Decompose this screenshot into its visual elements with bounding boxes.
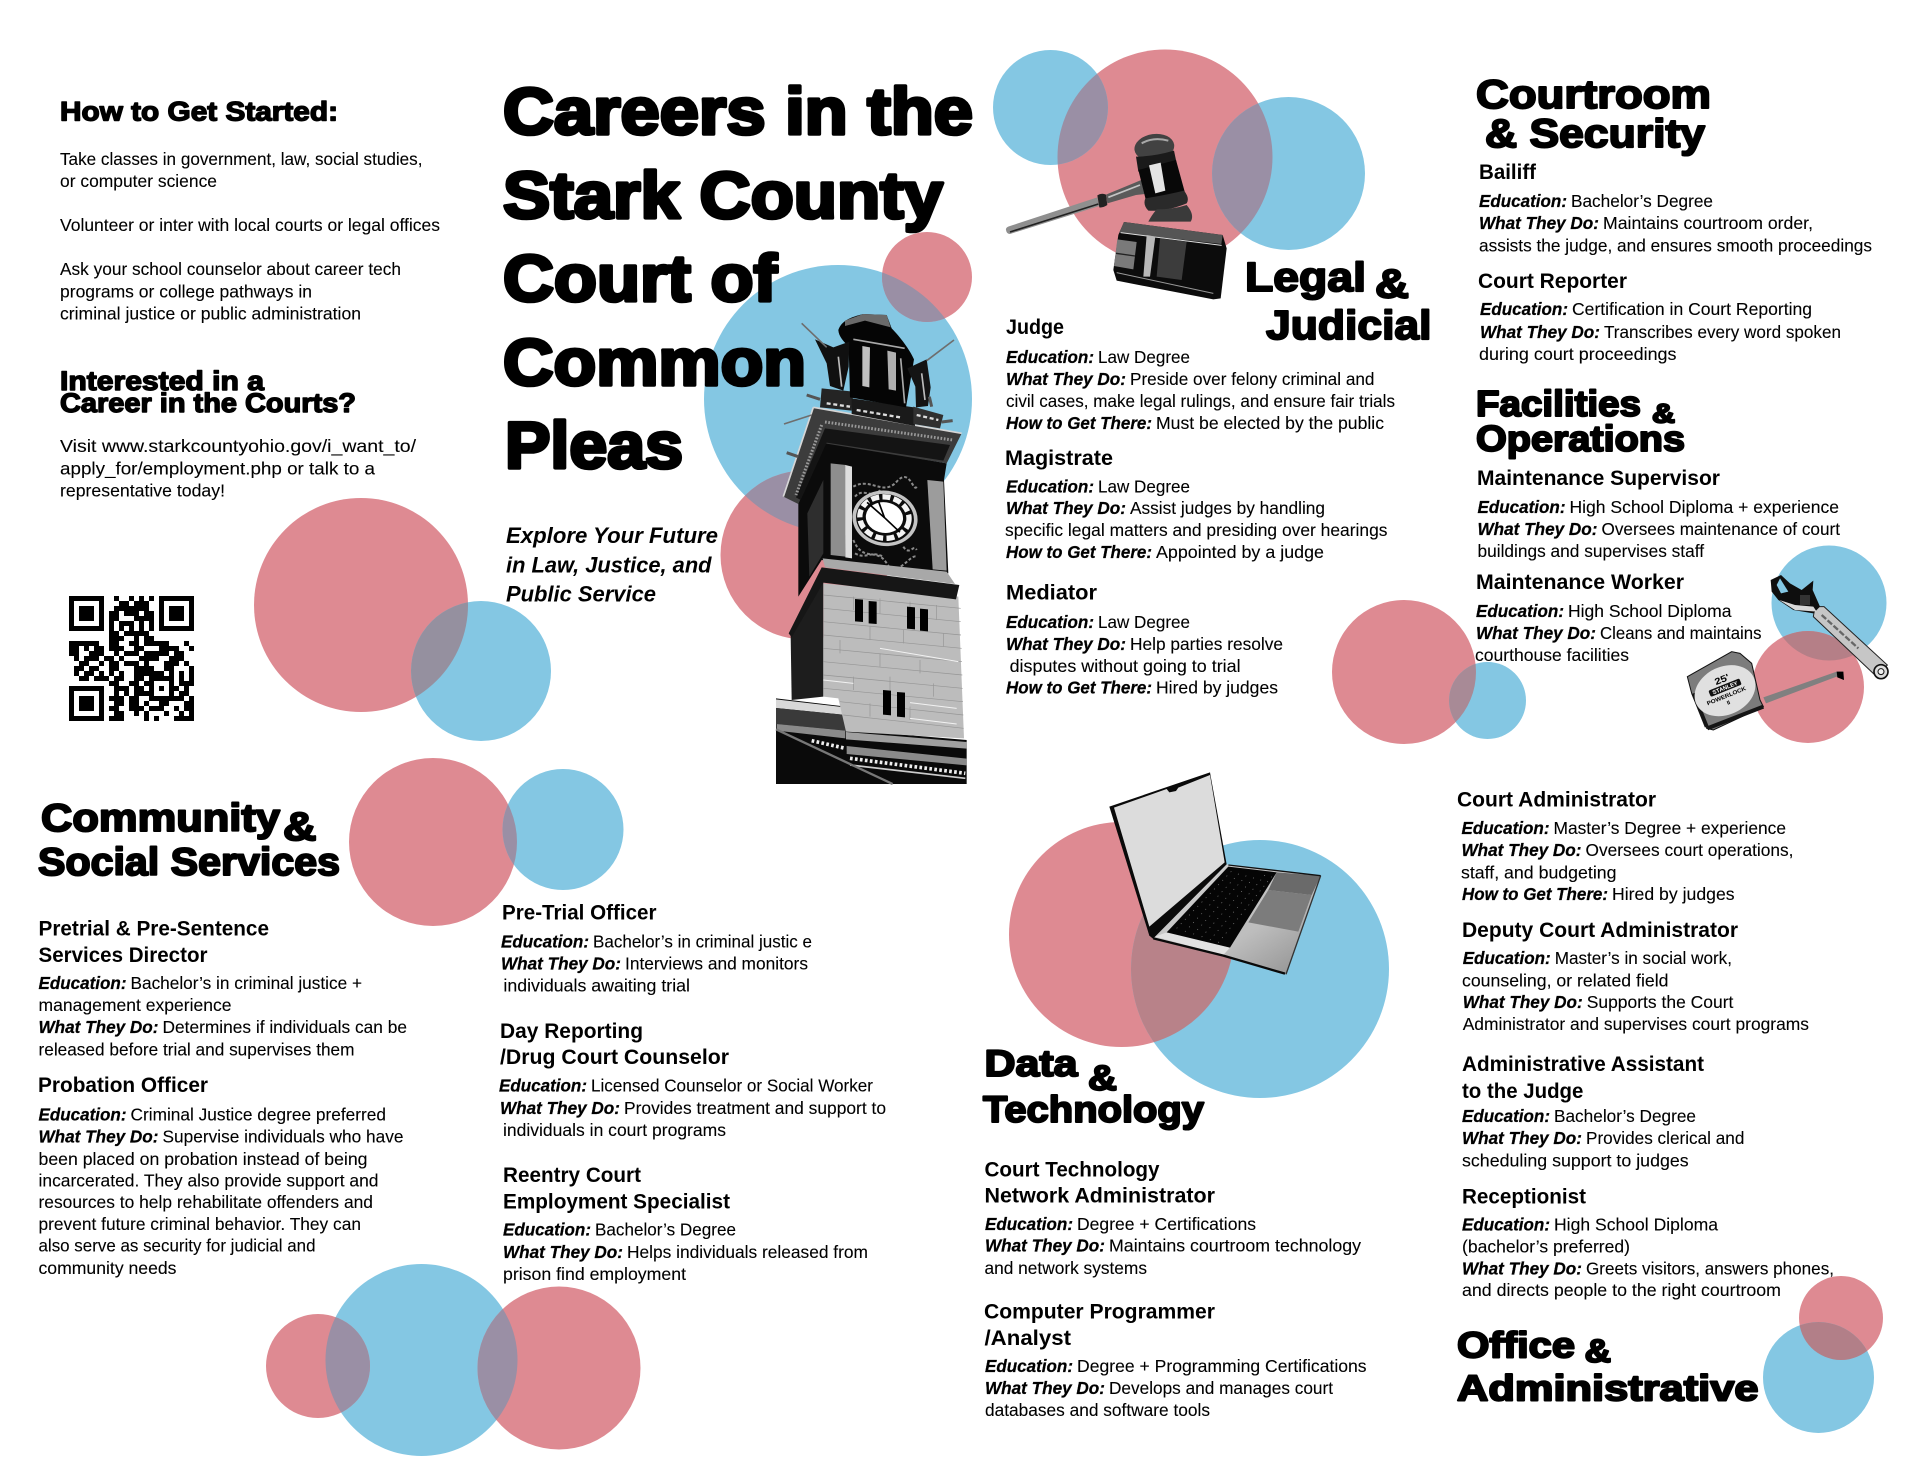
job: probation officer: prevent future criminal behavior. They can bbox=[38, 1214, 361, 1234]
job: court technology network administrator bbox=[984, 1158, 1361, 1278]
section heading: community and social services: Community bbox=[41, 797, 280, 840]
job: computer programmer analyst bbox=[984, 1300, 1367, 1420]
job: court reporter bbox=[1478, 269, 1841, 364]
job: court technology network administrator: and network systems bbox=[984, 1258, 1147, 1278]
job: pretrial and pre-sentence services director: Bachelor’s in criminal justice + bbox=[130, 973, 362, 993]
job: court administrator: Court Administrator bbox=[1457, 787, 1657, 811]
text block: steps: criminal justice or public administration bbox=[60, 304, 361, 324]
job: day reporting drug court counselor: individuals in court programs bbox=[503, 1120, 726, 1140]
job: day reporting drug court counselor bbox=[499, 1019, 886, 1140]
job: pretrial and pre-sentence services director: Pretrial & Pre-Sentence bbox=[38, 916, 269, 940]
section heading: office and administrative bbox=[1457, 1324, 1758, 1409]
section heading: data and technology bbox=[983, 1043, 1204, 1130]
job: pretrial and pre-sentence services director: What They Do: bbox=[38, 1017, 158, 1037]
job: reentry court employment specialist: What They Do: bbox=[503, 1242, 623, 1262]
job: deputy court administrator: Deputy Court Administrator bbox=[1462, 918, 1739, 942]
section heading: courtroom and security bbox=[1476, 73, 1711, 156]
job: reentry court employment specialist: Employment Specialist bbox=[503, 1189, 730, 1213]
decorative circles: behind tools bbox=[1752, 546, 1886, 743]
job: administrative assistant to the judge: to the Judge bbox=[1462, 1079, 1583, 1103]
title: Pleas bbox=[505, 408, 683, 482]
section heading: facilities and operations bbox=[1476, 383, 1685, 459]
job: day reporting drug court counselor: What They Do: bbox=[500, 1098, 620, 1118]
job: court technology network administrator: Degree + Certifications bbox=[1077, 1214, 1256, 1234]
job: maintenance worker bbox=[1475, 570, 1762, 665]
image: tape measure: STANLEY bbox=[1712, 681, 1739, 696]
decorative circles: mid right bbox=[1332, 600, 1526, 744]
image: laptop bbox=[1109, 772, 1321, 974]
job: court technology network administrator: Network Administrator bbox=[984, 1184, 1216, 1208]
section heading: community and social services: Social Services bbox=[38, 841, 340, 884]
job: bailiff: Maintains courtroom order, bbox=[1603, 213, 1813, 233]
top cornice bbox=[783, 407, 962, 504]
mid cornice bbox=[823, 558, 955, 584]
job: probation officer bbox=[38, 1073, 404, 1278]
text block: steps: Ask your school counselor about career tech bbox=[60, 259, 401, 279]
job: receptionist: Greets visitors, answers phones, bbox=[1586, 1258, 1834, 1278]
title bbox=[503, 74, 973, 482]
job: computer programmer analyst: Computer Programmer bbox=[984, 1300, 1216, 1324]
job: judge: Must be elected by the public bbox=[1156, 413, 1384, 433]
job: maintenance worker: Maintenance Worker bbox=[1476, 570, 1685, 594]
job: judge: Preside over felony criminal and bbox=[1130, 369, 1374, 389]
job: mediator: Help parties resolve bbox=[1130, 634, 1283, 654]
section heading: facilities and operations: Facilities bbox=[1476, 383, 1641, 424]
job: receptionist: Receptionist bbox=[1462, 1185, 1586, 1209]
title: Stark County bbox=[503, 158, 943, 232]
job: receptionist bbox=[1462, 1185, 1834, 1300]
job: mediator: How to Get There: bbox=[1006, 678, 1152, 698]
job: mediator: Mediator bbox=[1006, 580, 1098, 604]
decorative circles: behind clock tower bbox=[704, 232, 972, 640]
clock face bbox=[849, 486, 921, 550]
job: bailiff: assists the judge, and ensures smooth proceedings bbox=[1479, 236, 1872, 256]
job: administrative assistant to the judge: scheduling support to judges bbox=[1462, 1151, 1689, 1171]
job: receptionist: High School Diploma bbox=[1554, 1214, 1718, 1234]
image: tape measure bbox=[1686, 652, 1844, 730]
job: pretrial and pre-sentence services director: Services Director bbox=[38, 943, 208, 967]
job: bailiff: Education: bbox=[1479, 191, 1567, 211]
section heading: legal and judicial bbox=[1245, 254, 1432, 348]
job: administrative assistant to the judge: What They Do: bbox=[1462, 1128, 1582, 1148]
job: computer programmer analyst: Develops and manages court bbox=[1109, 1378, 1333, 1398]
section heading: courtroom and security: Courtroom bbox=[1476, 73, 1711, 117]
heading: interested in a career bbox=[60, 366, 356, 418]
section heading: legal and judicial: & bbox=[1375, 260, 1409, 306]
job: probation officer: community needs bbox=[38, 1258, 177, 1278]
job: administrative assistant to the judge: Provides clerical and bbox=[1586, 1128, 1744, 1148]
clock section bbox=[798, 442, 948, 597]
job: computer programmer analyst: /Analyst bbox=[984, 1326, 1071, 1350]
job: pre-trial officer: What They Do: bbox=[501, 954, 621, 974]
job: court technology network administrator: Court Technology bbox=[984, 1158, 1160, 1182]
text block: steps: Volunteer or inter with local courts or legal offices bbox=[60, 215, 440, 235]
job: court reporter: during court proceedings bbox=[1479, 344, 1677, 364]
subtitle: Public Service bbox=[506, 582, 656, 606]
job: deputy court administrator: Supports the Court bbox=[1587, 992, 1734, 1012]
job: receptionist: (bachelor’s preferred) bbox=[1462, 1237, 1630, 1257]
job: pre-trial officer bbox=[501, 900, 812, 996]
job: pretrial and pre-sentence services director: Determines if individuals can be bbox=[162, 1017, 407, 1037]
image: clock tower bbox=[776, 314, 967, 784]
job: court technology network administrator: What They Do: bbox=[985, 1236, 1105, 1256]
decorative circles: bottom centre bbox=[266, 1264, 640, 1456]
text block: steps: or computer science bbox=[60, 171, 217, 191]
panel: interested in a career bbox=[60, 366, 416, 500]
heading: interested in a career: Career in the Courts? bbox=[60, 388, 356, 418]
job: maintenance worker: What They Do: bbox=[1476, 623, 1596, 643]
job: court administrator: Oversees court operations, bbox=[1586, 840, 1794, 860]
job: maintenance supervisor: buildings and supervises staff bbox=[1478, 541, 1704, 561]
job: deputy court administrator: What They Do: bbox=[1463, 992, 1583, 1012]
job: administrative assistant to the judge: Administrative Assistant bbox=[1462, 1052, 1704, 1076]
job: court administrator: Master’s Degree + experience bbox=[1554, 818, 1786, 838]
job: deputy court administrator: Master’s in social work, bbox=[1555, 948, 1732, 968]
text block: steps: programs or college pathways in bbox=[60, 282, 312, 302]
section heading: data and technology: & bbox=[1088, 1059, 1117, 1098]
decorative circles: behind laptop bbox=[1009, 822, 1389, 1098]
job: administrative assistant to the judge: Bachelor’s Degree bbox=[1554, 1106, 1696, 1126]
subtitle: Explore Your Future bbox=[506, 523, 718, 548]
job: bailiff: What They Do: bbox=[1479, 213, 1599, 233]
job: day reporting drug court counselor: Day Reporting bbox=[500, 1019, 643, 1043]
subtitle bbox=[506, 523, 718, 606]
job: judge: Judge bbox=[1006, 315, 1064, 339]
building base bbox=[776, 698, 967, 784]
section heading: courtroom and security: & Security bbox=[1485, 112, 1706, 156]
job: probation officer: Probation Officer bbox=[38, 1073, 209, 1097]
job: reentry court employment specialist: prison find employment bbox=[503, 1264, 686, 1284]
job: computer programmer analyst: Education: bbox=[985, 1356, 1073, 1376]
job: deputy court administrator: Education: bbox=[1463, 948, 1551, 968]
job: reentry court employment specialist: Reentry Court bbox=[503, 1163, 641, 1187]
job: bailiff bbox=[1479, 160, 1872, 256]
title: Careers in the bbox=[503, 74, 973, 148]
job: judge bbox=[1006, 315, 1395, 433]
section heading: community and social services bbox=[38, 797, 340, 884]
decorative circles: behind gavel bbox=[993, 50, 1365, 264]
job: pre-trial officer: individuals awaiting trial bbox=[503, 976, 690, 996]
job: probation officer: Criminal Justice degree preferred bbox=[130, 1105, 386, 1125]
statues and trumpets bbox=[784, 323, 954, 457]
job: pretrial and pre-sentence services director: management experience bbox=[38, 995, 232, 1015]
job: probation officer: Supervise individuals who have bbox=[162, 1126, 404, 1146]
job: probation officer: incarcerated. They also provide support and bbox=[38, 1171, 378, 1191]
job: deputy court administrator: counseling, or related field bbox=[1462, 970, 1668, 990]
job: maintenance supervisor: High School Diploma + experience bbox=[1570, 497, 1839, 517]
job: mediator: Hired by judges bbox=[1156, 678, 1278, 698]
job: magistrate bbox=[1005, 446, 1388, 562]
decorative circles: office heading bbox=[1763, 1276, 1883, 1433]
section heading: data and technology: Data bbox=[984, 1043, 1078, 1084]
job: judge: What They Do: bbox=[1006, 369, 1126, 389]
job: probation officer: also serve as security for judicial and bbox=[38, 1236, 316, 1256]
job: computer programmer analyst: Degree + Programming Certifications bbox=[1077, 1356, 1367, 1376]
job: computer programmer analyst: What They Do: bbox=[985, 1378, 1105, 1398]
job: bailiff: Bachelor’s Degree bbox=[1571, 191, 1713, 211]
job: pretrial and pre-sentence services director bbox=[38, 916, 407, 1060]
job: court administrator: staff, and budgeting bbox=[1461, 863, 1616, 883]
job: court reporter: What They Do: bbox=[1480, 322, 1600, 342]
job: administrative assistant to the judge: Education: bbox=[1462, 1106, 1550, 1126]
image: tape measure: 25' bbox=[1713, 672, 1731, 687]
job: computer programmer analyst: databases and software tools bbox=[985, 1400, 1210, 1420]
job: court technology network administrator: Education: bbox=[985, 1214, 1073, 1234]
image: tape measure: II bbox=[1726, 700, 1732, 707]
image: gavel bbox=[1006, 131, 1227, 299]
job: receptionist: and directs people to the right courtroom bbox=[1462, 1280, 1781, 1300]
job: reentry court employment specialist: Education: bbox=[503, 1220, 591, 1240]
job: mediator bbox=[1006, 580, 1283, 698]
job: magistrate: Appointed by a judge bbox=[1156, 542, 1324, 562]
text block: employment link bbox=[60, 436, 416, 500]
job: pre-trial officer: Interviews and monitors bbox=[625, 954, 808, 974]
job: reentry court employment specialist bbox=[503, 1163, 868, 1284]
job: probation officer: Education: bbox=[38, 1105, 126, 1125]
section heading: facilities and operations: Operations bbox=[1476, 418, 1685, 459]
job: maintenance supervisor bbox=[1477, 466, 1840, 561]
job: bailiff: Bailiff bbox=[1479, 160, 1537, 184]
job: pre-trial officer: Education: bbox=[501, 931, 589, 951]
job: court technology network administrator: Maintains courtroom technology bbox=[1109, 1236, 1361, 1256]
job: day reporting drug court counselor: /Drug Court Counselor bbox=[500, 1045, 730, 1069]
job: reentry court employment specialist: Helps individuals released from bbox=[627, 1242, 868, 1262]
subtitle: in Law, Justice, and bbox=[506, 552, 713, 578]
job: mediator: Law Degree bbox=[1098, 612, 1190, 632]
text block: employment link: Visit www.starkcountyohio.gov/i_want_to/ bbox=[60, 436, 416, 457]
heading: interested in a career: Interested in a bbox=[60, 366, 265, 396]
panel: how to get started bbox=[60, 96, 440, 324]
lower tower left face bbox=[791, 582, 823, 700]
job: mediator: disputes without going to trial bbox=[1010, 656, 1241, 676]
title: Common bbox=[503, 325, 806, 399]
decorative circles: community heading bbox=[349, 758, 624, 926]
job: pre-trial officer: Bachelor’s in criminal justic e bbox=[593, 931, 812, 951]
job: probation officer: resources to help rehabilitate offenders and bbox=[38, 1192, 373, 1212]
job: reentry court employment specialist: Bachelor’s Degree bbox=[595, 1220, 736, 1240]
job: court administrator: What They Do: bbox=[1462, 840, 1582, 860]
job: maintenance worker: courthouse facilities bbox=[1475, 645, 1629, 665]
job: deputy court administrator: Administrator and supervises court programs bbox=[1463, 1014, 1809, 1034]
job: judge: Education: bbox=[1006, 347, 1094, 367]
job: mediator: Education: bbox=[1006, 612, 1094, 632]
text block: employment link: representative today! bbox=[60, 480, 225, 500]
heading: how to get started: How to Get Started: bbox=[60, 96, 338, 126]
job: probation officer: What They Do: bbox=[38, 1126, 158, 1146]
icon: QR code bbox=[69, 598, 194, 718]
job: court administrator: Hired by judges bbox=[1612, 884, 1735, 904]
job: pretrial and pre-sentence services director: Education: bbox=[38, 973, 126, 993]
job: receptionist: Education: bbox=[1462, 1214, 1550, 1234]
job: magistrate: How to Get There: bbox=[1006, 542, 1152, 562]
job: court administrator: How to Get There: bbox=[1462, 884, 1608, 904]
section heading: facilities and operations: & bbox=[1652, 398, 1675, 428]
job: magistrate: Law Degree bbox=[1098, 476, 1190, 496]
image: tape measure: POWERLOCK bbox=[1706, 686, 1748, 707]
job: administrative assistant to the judge bbox=[1462, 1052, 1744, 1171]
image: wrench bbox=[1771, 575, 1888, 679]
job: court reporter: Education: bbox=[1480, 299, 1568, 319]
section heading: office and administrative: & bbox=[1585, 1333, 1611, 1369]
job: court administrator bbox=[1457, 787, 1794, 904]
job: judge: How to Get There: bbox=[1006, 413, 1152, 433]
balustrade bbox=[820, 388, 853, 411]
job: magistrate: What They Do: bbox=[1006, 498, 1126, 518]
cupola bbox=[838, 314, 914, 407]
job: maintenance supervisor: Maintenance Supervisor bbox=[1477, 466, 1721, 490]
section heading: office and administrative: Administrative bbox=[1457, 1368, 1758, 1409]
job: magistrate: Assist judges by handling bbox=[1130, 498, 1325, 518]
job: maintenance worker: Cleans and maintains bbox=[1600, 623, 1762, 643]
job: court reporter: Court Reporter bbox=[1478, 269, 1628, 293]
job: maintenance worker: High School Diploma bbox=[1568, 601, 1732, 621]
title: Court of bbox=[503, 241, 778, 315]
job: deputy court administrator bbox=[1462, 918, 1809, 1034]
job: magistrate: Education: bbox=[1006, 476, 1094, 496]
text block: employment link: apply_for/employment.php or talk to a bbox=[60, 458, 375, 480]
job: judge: Law Degree bbox=[1098, 347, 1190, 367]
job: judge: civil cases, make legal rulings, and ensure fair trials bbox=[1006, 391, 1395, 411]
text block: steps bbox=[60, 149, 440, 324]
job: day reporting drug court counselor: Licensed Counselor or Social Worker bbox=[591, 1076, 873, 1096]
job: maintenance supervisor: Education: bbox=[1478, 497, 1566, 517]
job: pre-trial officer: Pre-Trial Officer bbox=[502, 900, 657, 924]
decorative circles: QR area bbox=[254, 498, 551, 741]
section heading: office and administrative: Office bbox=[1457, 1324, 1575, 1366]
section heading: legal and judicial: Legal bbox=[1245, 254, 1366, 300]
job: day reporting drug court counselor: Education: bbox=[499, 1076, 587, 1096]
clock ornaments bbox=[853, 477, 917, 569]
job: probation officer: been placed on probation instead of being bbox=[38, 1149, 368, 1169]
job: receptionist: What They Do: bbox=[1462, 1258, 1582, 1278]
section heading: community and social services: & bbox=[283, 805, 316, 849]
tower windows bbox=[855, 599, 928, 717]
job: court reporter: Transcribes every word spoken bbox=[1604, 322, 1841, 342]
text block: steps: Take classes in government, law, social studies, bbox=[60, 149, 422, 169]
job: maintenance supervisor: What They Do: bbox=[1478, 519, 1598, 539]
job: maintenance worker: Education: bbox=[1476, 601, 1564, 621]
job: day reporting drug court counselor: Provides treatment and support to bbox=[624, 1098, 886, 1118]
job: pretrial and pre-sentence services director: released before trial and supervises them bbox=[38, 1040, 354, 1060]
job: court reporter: Certification in Court Reporting bbox=[1572, 299, 1812, 319]
job: magistrate: Magistrate bbox=[1005, 446, 1113, 470]
job: maintenance supervisor: Oversees maintenance of court bbox=[1602, 519, 1840, 539]
job: court administrator: Education: bbox=[1462, 818, 1550, 838]
lower tower front face bbox=[823, 583, 964, 738]
job: mediator: What They Do: bbox=[1006, 634, 1126, 654]
job: magistrate: specific legal matters and presiding over hearings bbox=[1005, 520, 1388, 540]
section heading: legal and judicial: Judicial bbox=[1266, 302, 1432, 348]
section heading: data and technology: Technology bbox=[983, 1089, 1204, 1130]
